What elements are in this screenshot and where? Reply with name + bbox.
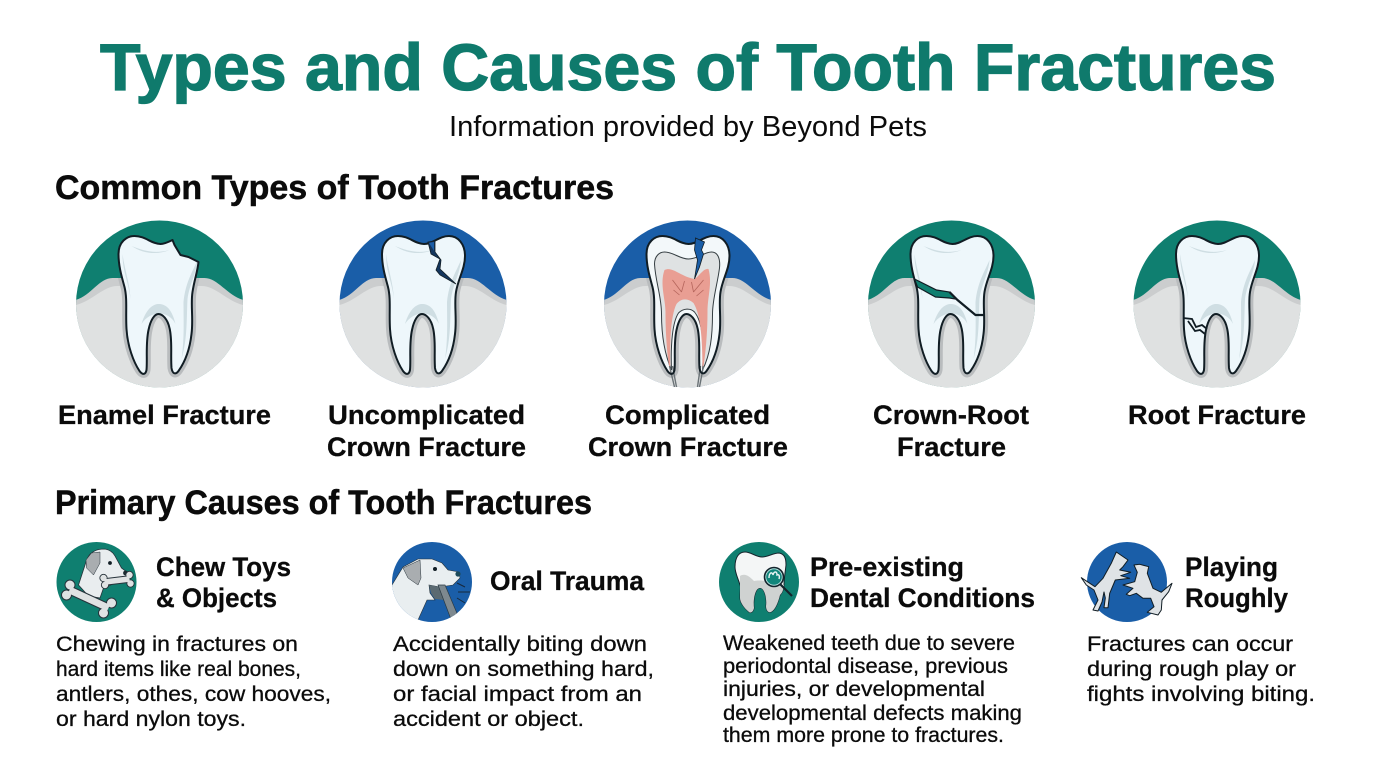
icon: uncomplicated crown fracture tooth xyxy=(340,220,506,388)
label: uncomplicated crown fracture: Crown Fracture xyxy=(327,432,526,462)
label: crown-root fracture: Crown-Root xyxy=(873,400,1029,430)
label: uncomplicated crown fracture: Uncomplicated xyxy=(328,400,525,430)
text: oral trauma description: Accidentally biting down xyxy=(393,632,647,656)
text: pre-existing description: periodontal disease, previous xyxy=(723,654,1008,678)
panel: enamel fracture xyxy=(58,220,271,430)
text: pre-existing description xyxy=(723,631,1022,747)
icon: two dogs playing xyxy=(1081,542,1172,622)
label: complicated crown fracture: Complicated xyxy=(605,400,770,430)
panel: root fracture xyxy=(1127,220,1307,430)
title: Types and Causes of Tooth Fractures xyxy=(100,30,1276,104)
icon: crown-root fracture tooth xyxy=(868,220,1035,388)
heading: primary causes: Primary Causes of Tooth Fractures xyxy=(55,484,592,522)
label: complicated crown fracture xyxy=(588,400,788,462)
panel: crown-root fracture xyxy=(862,220,1042,462)
label: root fracture: Root Fracture xyxy=(1128,400,1306,430)
text: pre-existing description: Weakened teeth due to severe xyxy=(723,631,1015,655)
label: complicated crown fracture: Crown Fracture xyxy=(588,432,788,462)
heading: oral trauma: Oral Trauma xyxy=(490,566,645,596)
text: oral trauma description: down on something hard, xyxy=(393,657,654,681)
icon: tooth under magnifier xyxy=(719,542,799,622)
text: oral trauma description: or facial impact from an xyxy=(393,682,642,706)
icon: root fracture tooth xyxy=(1134,220,1300,388)
text: chew toys description: Chewing in fractures on xyxy=(56,632,298,656)
heading: chew toys: Chew Toys xyxy=(156,552,291,582)
panel: oral trauma xyxy=(382,542,654,731)
panel: complicated crown fracture xyxy=(588,220,788,462)
icon: enamel fracture tooth xyxy=(76,220,243,388)
text: chew toys description: hard items like real bones, xyxy=(56,657,301,681)
label: crown-root fracture xyxy=(873,400,1029,462)
text: playing roughly description: fights involving biting. xyxy=(1087,682,1315,706)
label: enamel fracture: Enamel Fracture xyxy=(58,400,271,430)
heading: pre-existing dental conditions: Pre-existing xyxy=(810,552,964,582)
icon: complicated crown fracture tooth xyxy=(604,220,771,388)
label: crown-root fracture: Fracture xyxy=(897,432,1006,462)
heading: playing roughly: Playing xyxy=(1185,552,1278,582)
text: chew toys description xyxy=(56,632,331,731)
text: playing roughly description: Fractures can occur xyxy=(1087,632,1293,656)
text: pre-existing description: them more prone to fractures. xyxy=(723,723,1004,747)
panel: uncomplicated crown fracture xyxy=(327,220,526,462)
text: playing roughly description: during rough play or xyxy=(1087,657,1296,681)
panel: pre-existing dental conditions xyxy=(719,542,1035,747)
subtitle: Information provided by Beyond Pets xyxy=(449,111,927,143)
text: pre-existing description: injuries, or developmental xyxy=(723,677,985,701)
text: oral trauma description: accident or object. xyxy=(393,707,584,731)
heading: pre-existing dental conditions xyxy=(810,552,1035,613)
heading: pre-existing dental conditions: Dental Conditions xyxy=(810,583,1035,613)
label: uncomplicated crown fracture xyxy=(327,400,526,462)
panel: playing roughly xyxy=(1081,542,1315,706)
panel: chew toys and objects xyxy=(56,542,331,731)
text: oral trauma description xyxy=(393,632,654,731)
heading: common types: Common Types of Tooth Fractures xyxy=(55,169,614,207)
text: pre-existing description: developmental defects making xyxy=(723,701,1022,725)
heading: chew toys: & Objects xyxy=(156,583,277,613)
heading: playing roughly xyxy=(1185,552,1288,613)
text: chew toys description: or hard nylon toys. xyxy=(56,707,246,731)
icon: dog chewing bone xyxy=(56,542,136,622)
heading: chew toys xyxy=(156,552,291,613)
text: chew toys description: antlers, othes, cow hooves, xyxy=(56,682,331,706)
heading: playing roughly: Roughly xyxy=(1185,583,1288,613)
text: playing roughly description xyxy=(1087,632,1315,706)
icon: dog biting stick xyxy=(392,542,472,622)
